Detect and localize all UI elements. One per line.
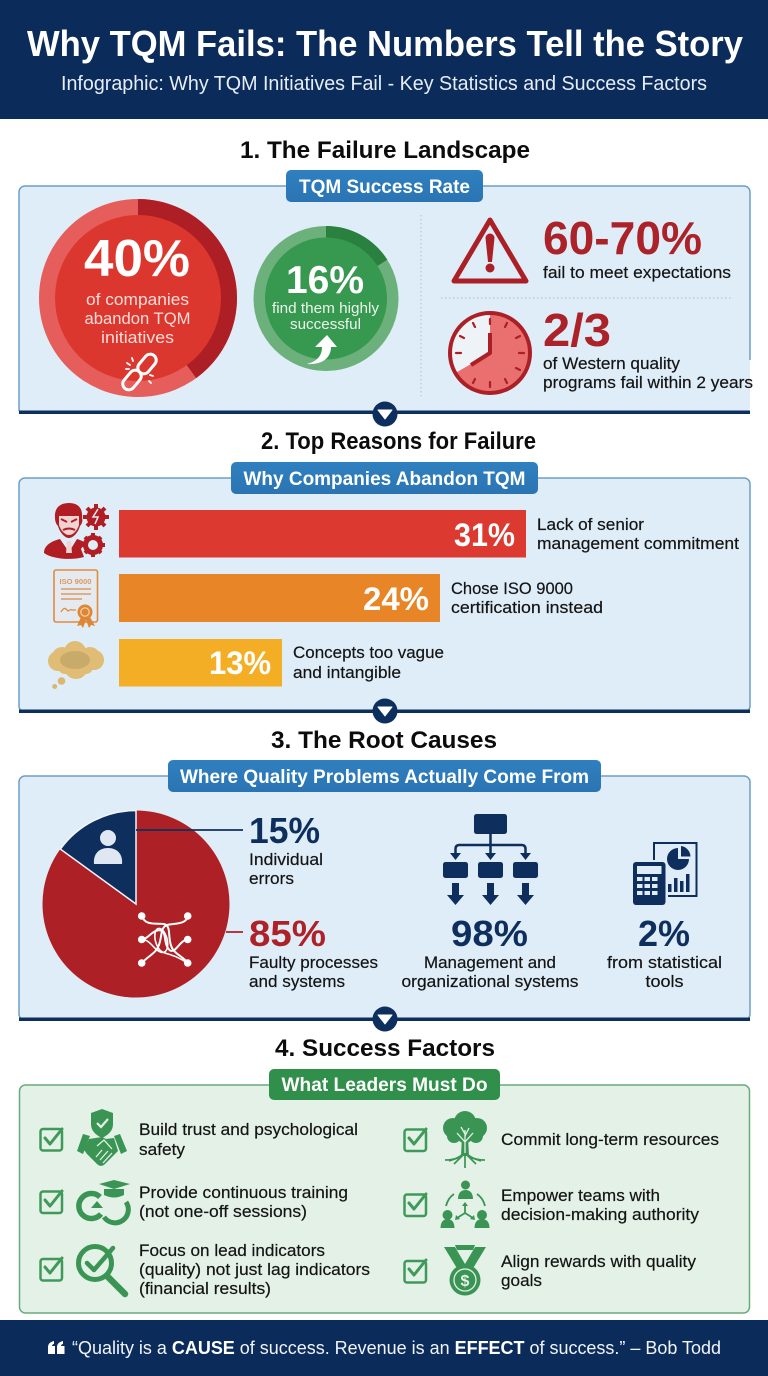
pill: TQM success rate (286, 170, 483, 202)
stat: 15% individual errors (249, 810, 323, 888)
chart: 16% donut: find them highly (272, 300, 380, 317)
panel: success factors (20, 1069, 750, 1313)
pill: why companies abandon (231, 462, 538, 494)
stat: 15% individual errors: errors (249, 869, 294, 888)
stat: 98% management: 98% (451, 913, 528, 954)
stat: 98% management: Management and (424, 953, 556, 972)
chart: 40% donut: abandon TQM (84, 309, 190, 328)
stat: 2% statistical tools: from statistical (607, 953, 722, 972)
heading: section 1: 1. The Failure Landscape (240, 137, 530, 164)
chart: pie 15/85 (42, 810, 243, 998)
stat: 60-70%: 60-70% (543, 212, 702, 264)
text: continuous training: (not one-off sessions) (139, 1202, 307, 1221)
panel: root causes (19, 760, 750, 1021)
panel: failure landscape (19, 170, 753, 414)
pill: why companies abandon: Why Companies Abandon TQM (244, 468, 526, 490)
icon: ISO certificate: ISO 9000 (60, 579, 92, 586)
icon: training loop and cap (79, 1180, 130, 1223)
stat: 15% individual errors: Individual (249, 850, 323, 869)
text: continuous training: Provide continuous training (139, 1183, 348, 1202)
text: build trust: safety (139, 1140, 186, 1159)
label: vague concepts: and intangible (293, 663, 401, 682)
text: build trust (139, 1120, 358, 1159)
text: empower teams: Empower teams with (501, 1186, 660, 1205)
label: ISO 9000: Chose ISO 9000 (451, 579, 573, 598)
stat: 2% statistical tools: 2% (638, 913, 690, 954)
bar: 31% (119, 510, 526, 558)
arrow badge 3 (372, 1006, 398, 1032)
heading: section 3: 3. The Root Causes (271, 727, 497, 754)
stat: 60-70%: fail to meet expectations (543, 263, 731, 282)
stat: 60-70% (543, 212, 731, 282)
icon: angry manager and gears (44, 503, 109, 559)
icon: quote marks (48, 1341, 64, 1354)
stat: 85% faulty processes: and systems (249, 972, 345, 991)
chart: 40% donut: 40% (84, 230, 190, 288)
stat: 98% management: organizational systems (402, 972, 578, 991)
bar: 24% (119, 574, 440, 622)
icon: warning triangle (454, 220, 526, 281)
icon: magnifier and check (78, 1246, 125, 1294)
bar: 13%: 13% (209, 645, 271, 681)
label: lack of commitment (537, 515, 739, 553)
bar: 31%: 31% (454, 517, 515, 553)
title: Why TQM Fails: The Numbers Tell the Story (27, 23, 743, 64)
chart: 16% donut: 16% (286, 259, 364, 302)
arrow badge 2 (372, 698, 398, 724)
label: ISO 9000: certification instead (451, 598, 603, 617)
icon: handshake and shield (77, 1109, 127, 1166)
stat: 98% management (402, 913, 578, 991)
text: lead indicators (139, 1241, 370, 1298)
icon: calculator and report (633, 843, 696, 905)
text: lead indicators: (quality) not just lag indicators (139, 1260, 370, 1279)
icon: ISO certificate (54, 570, 98, 628)
chart: 40% donut: of companies (86, 290, 189, 309)
icon: empowered team (440, 1180, 490, 1228)
chart: 40% donut (39, 199, 237, 397)
text: continuous training (139, 1183, 348, 1221)
stat: 2/3 (543, 304, 753, 392)
checkboxes (40, 1129, 426, 1282)
icon: vague cloud (48, 641, 104, 689)
stat: 2/3: programs fail within 2 years (543, 373, 753, 392)
stat: 15% individual errors: 15% (249, 810, 320, 851)
stat: 85% faulty processes: 85% (249, 913, 326, 954)
stat: 2/3: of Western quality (543, 354, 680, 373)
stat: 85% faulty processes (249, 913, 378, 991)
pill: what leaders must do (269, 1069, 500, 1100)
heading: section 4: 4. Success Factors (275, 1035, 495, 1062)
label: lack of commitment: management commitment (537, 534, 739, 553)
heading: section 2: 2. Top Reasons for Failure (261, 428, 536, 455)
text: empower teams: decision-making authority (501, 1205, 700, 1224)
text: empower teams (501, 1186, 700, 1224)
stat: 2/3: 2/3 (543, 304, 611, 356)
stat: 2% statistical tools: tools (646, 972, 684, 991)
text: lead indicators: Focus on lead indicators (139, 1241, 325, 1260)
icon: clock (450, 313, 530, 393)
chart: 16% donut (254, 226, 398, 371)
icon: rising arrow (307, 335, 337, 364)
text: long-term resources: Commit long-term resources (501, 1130, 719, 1149)
stat: 85% faulty processes: Faulty processes (249, 953, 378, 972)
icon: rooted tree (443, 1111, 487, 1168)
pill: what leaders must do: What Leaders Must Do (282, 1074, 488, 1096)
stat: 2% statistical tools (607, 913, 722, 991)
icon: org chart (443, 814, 538, 905)
pill: TQM success rate: TQM Success Rate (299, 176, 470, 198)
icon: medal (444, 1245, 486, 1296)
header banner (0, 0, 768, 119)
icon: person (94, 830, 122, 864)
text: align rewards: Align rewards with quality (501, 1252, 697, 1271)
icon: tangled processes (138, 912, 192, 967)
pill: where problems come from: Where Quality Problems Actually Come From (180, 766, 589, 788)
label: lack of commitment: Lack of senior (537, 515, 644, 534)
chart: 16% donut: successful (290, 316, 361, 333)
panel: top reasons (19, 462, 750, 713)
footer quote band (0, 1320, 768, 1376)
label: vague concepts: Concepts too vague (293, 643, 444, 662)
icon: medal: $ (461, 1273, 470, 1290)
pill: where problems come from (168, 760, 601, 792)
label: vague concepts (293, 643, 444, 682)
subtitle: Infographic: Why TQM Initiatives Fail - Key Statistics and Success Factors (61, 73, 707, 95)
text: align rewards: goals (501, 1271, 542, 1290)
quote text: “Quality is a CAUSE of success. Revenue is an EFFECT of success.” – Bob Todd (72, 1338, 721, 1358)
bar: 24%: 24% (363, 581, 429, 617)
bar: 13% (119, 639, 282, 686)
text: lead indicators: (financial results) (139, 1279, 271, 1298)
text: build trust: Build trust and psychological (139, 1120, 358, 1139)
chart: 40% donut: initiatives (101, 328, 174, 347)
text: align rewards (501, 1252, 697, 1290)
label: ISO 9000 (451, 579, 603, 617)
arrow badge 1 (372, 402, 398, 426)
icon: broken link (120, 352, 159, 392)
